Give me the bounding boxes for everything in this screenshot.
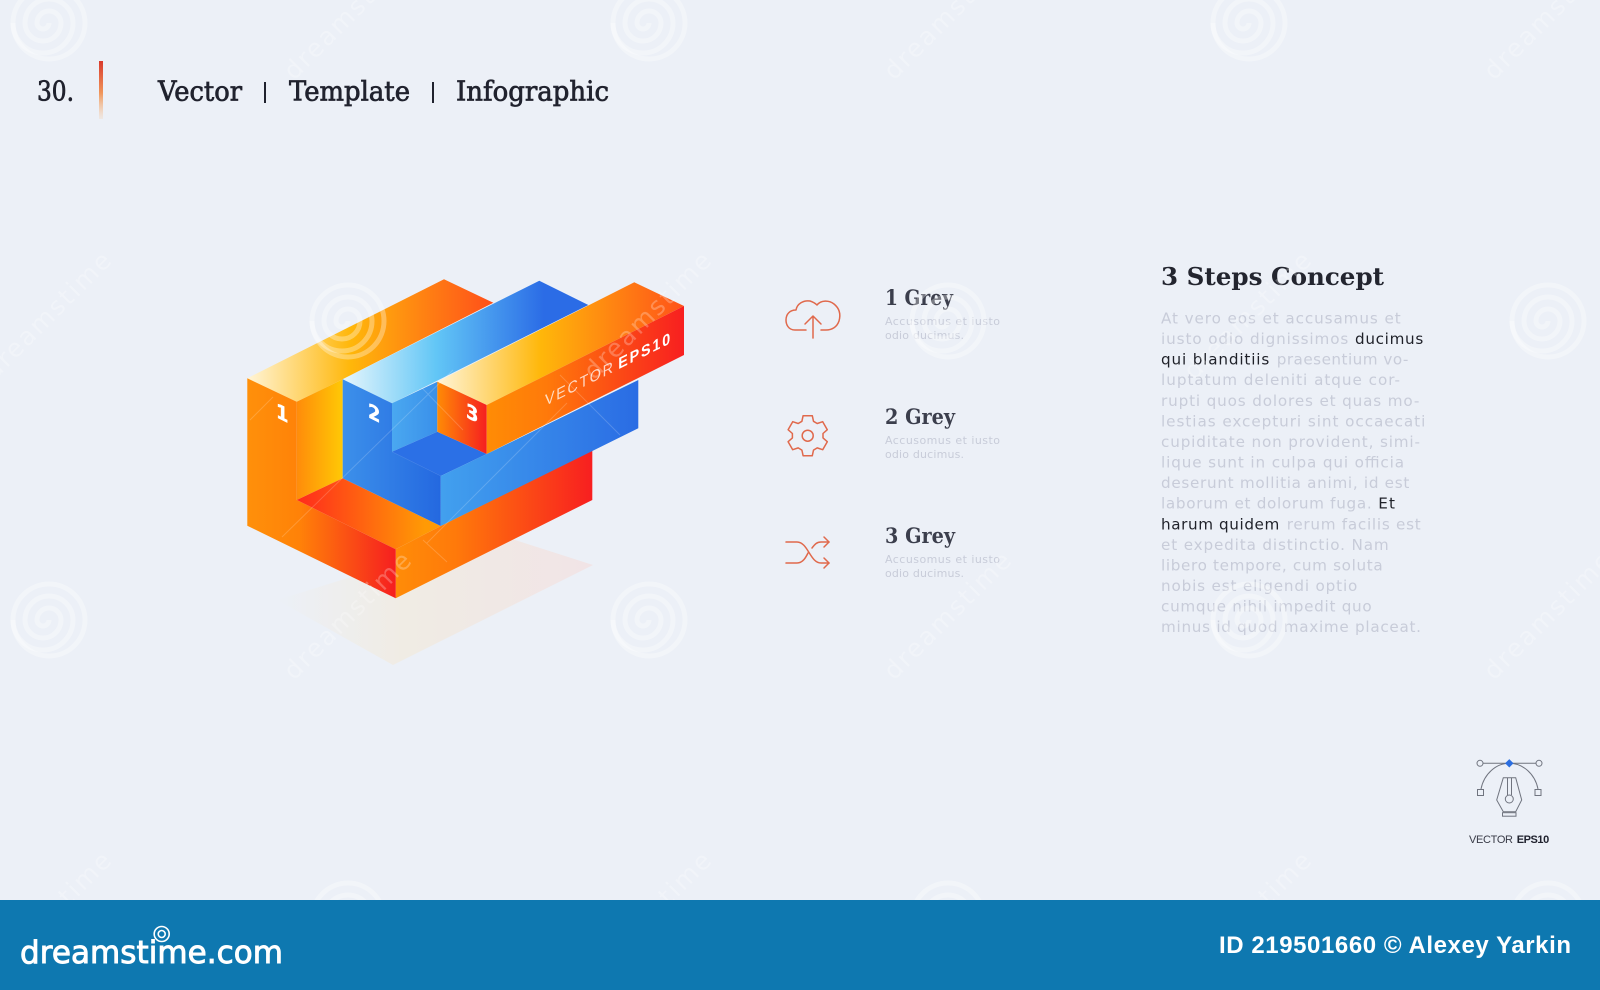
concept body paragraph xyxy=(1161,310,1425,636)
list of three items xyxy=(786,285,1000,580)
icon: cloud upload xyxy=(786,301,840,338)
badge label: VECTOR xyxy=(1469,834,1513,846)
concept body paragraph: cumque nihil impedit quo xyxy=(1161,598,1372,616)
vector eps10 badge xyxy=(1469,760,1549,846)
icon: pen tool xyxy=(1477,760,1542,816)
step number 2: 2 xyxy=(368,398,380,428)
header title words: Infographic xyxy=(456,76,609,108)
item 2 description: odio ducimus. xyxy=(885,448,964,461)
header title words: Template xyxy=(289,76,410,108)
footer credit: ID 219501660 © Alexey Yarkin xyxy=(1219,932,1571,959)
item 2 heading: 2 Grey xyxy=(885,404,956,429)
block label vector eps10: EPS10 xyxy=(618,330,670,373)
isometric floor shadow xyxy=(277,533,593,665)
item 2 xyxy=(788,404,1000,461)
concept body paragraph: luptatum deleniti atque cor- xyxy=(1161,371,1400,389)
header number: 30. xyxy=(37,76,74,108)
badge label xyxy=(1469,834,1549,846)
concept body paragraph: et expedita distinctio. Nam xyxy=(1161,536,1389,554)
watermark overlay: dreamstime xyxy=(1178,846,1317,985)
concept heading: 3 Steps Concept xyxy=(1161,262,1384,291)
item 3 description xyxy=(885,553,1000,580)
item 2 description xyxy=(885,434,1000,461)
concept body paragraph: harum quidem xyxy=(1161,515,1279,533)
step number 1: 1 xyxy=(276,398,288,428)
concept body paragraph: Et xyxy=(1378,495,1395,513)
footer bar xyxy=(0,900,1600,990)
item 1 description: Accusomus et iusto xyxy=(885,315,1000,328)
watermark overlay: dreamstime xyxy=(878,546,1017,685)
item 1 heading: 1 Grey xyxy=(885,285,954,310)
watermark overlay: dreamstime xyxy=(278,546,417,685)
header title words xyxy=(157,76,609,108)
header title words: Vector xyxy=(157,76,242,108)
watermark overlay: dreamstime xyxy=(1178,246,1317,385)
watermark overlay: dreamstime xyxy=(578,846,717,985)
concept body paragraph: ducimus xyxy=(1355,330,1423,348)
block label vector eps10 xyxy=(545,330,670,410)
item 3 xyxy=(786,523,1000,580)
badge label: EPS10 xyxy=(1517,834,1549,846)
block label vector eps10: VECTOR xyxy=(545,359,613,410)
step 3 orange block xyxy=(437,282,684,454)
isometric 3 step block chart xyxy=(247,279,684,598)
concept body paragraph: minus id quod maxime placeat. xyxy=(1161,618,1421,636)
concept body paragraph: cupiditate non provident, simi- xyxy=(1161,433,1420,451)
item 1 description: odio ducimus. xyxy=(885,329,964,342)
concept body paragraph: lestias excepturi sint occaecati xyxy=(1161,412,1425,430)
concept body paragraph: deserunt mollitia animi, id est xyxy=(1161,474,1409,492)
icon: shuffle arrows xyxy=(786,537,829,568)
step 2 blue block xyxy=(343,281,638,526)
concept body paragraph: libero tempore, cum soluta xyxy=(1161,556,1383,574)
concept body paragraph: laborum et dolorum fuga. xyxy=(1161,495,1372,513)
icon: logo spiral xyxy=(154,926,169,942)
item 2 description: Accusomus et iusto xyxy=(885,434,1000,447)
step 1 orange block xyxy=(247,279,592,598)
concept body paragraph: lique sunt in culpa qui officia xyxy=(1161,454,1404,472)
concept body paragraph: praesentium vo- xyxy=(1277,351,1408,369)
item 3 heading: 3 Grey xyxy=(885,523,956,548)
icon: gear xyxy=(788,416,827,456)
concept body paragraph: qui blanditiis xyxy=(1161,351,1269,369)
concept body paragraph: rerum facilis est xyxy=(1287,515,1421,533)
concept body paragraph: iusto odio dignissimos xyxy=(1161,330,1348,348)
concept body paragraph: rupti quos dolores et quas mo- xyxy=(1161,392,1419,410)
concept body paragraph: At vero eos et accusamus et xyxy=(1161,310,1401,328)
watermark overlay: dreamstime xyxy=(578,246,717,385)
item 1 description xyxy=(885,315,1000,342)
header xyxy=(37,61,609,119)
header accent tick xyxy=(99,61,103,119)
concept body paragraph: nobis est eligendi optio xyxy=(1161,577,1357,595)
step number 3: 3 xyxy=(466,398,478,428)
item 3 description: Accusomus et iusto xyxy=(885,553,1000,566)
item 1 xyxy=(786,285,1000,342)
item 3 description: odio ducimus. xyxy=(885,567,964,580)
footer logo text: dreamstime.com xyxy=(20,935,283,971)
